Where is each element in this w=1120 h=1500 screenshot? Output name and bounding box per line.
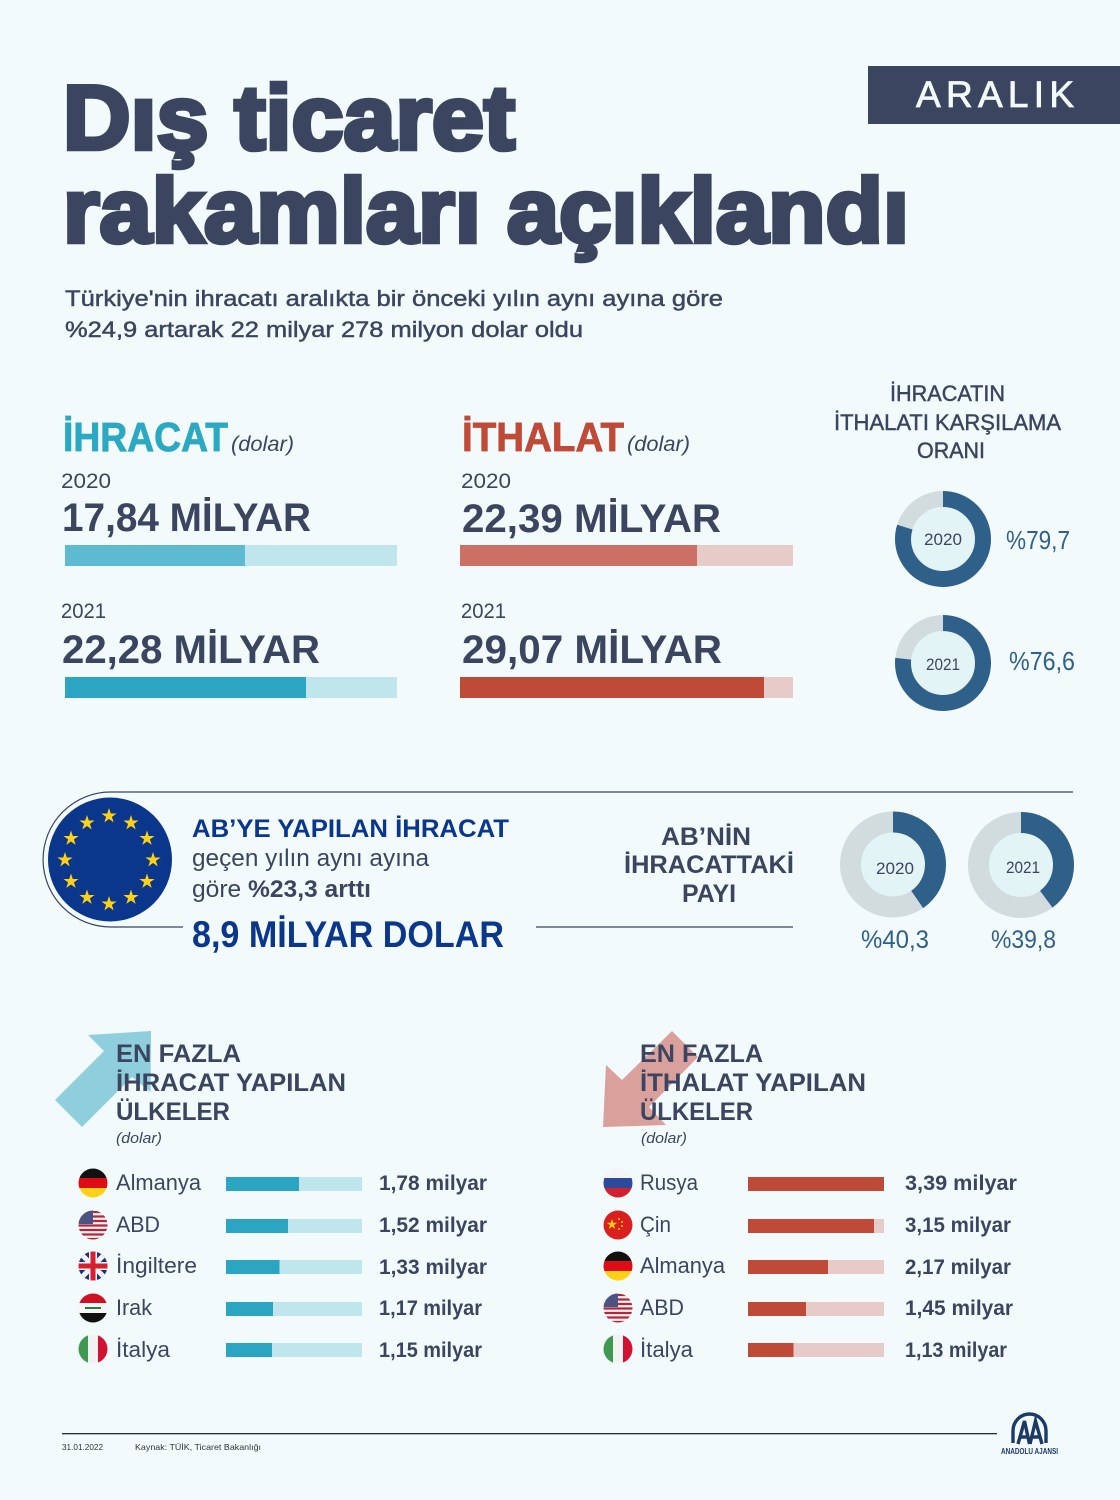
export 2020 value: 17,84 MİLYAR xyxy=(62,496,311,540)
text block: EU exports: AB’YE YAPILAN İHRACAT xyxy=(192,815,509,843)
heading: top import countries: (dolar) xyxy=(641,1130,687,1147)
row: Çin xyxy=(604,1210,1011,1240)
subtitle text xyxy=(65,286,723,342)
heading: top export countries xyxy=(116,1040,346,1147)
heading: coverage ratio: İTHALATI KARŞILAMA xyxy=(834,410,1061,435)
icon: up arrow xyxy=(55,1031,151,1127)
row: İngiltere: 1,33 milyar xyxy=(379,1256,487,1279)
row: İtalya: 1,13 milyar xyxy=(905,1339,1007,1362)
export 2021 value: 2021 xyxy=(61,600,106,623)
heading: coverage ratio: İHRACATIN xyxy=(890,381,1005,406)
heading: İhracat: İHRACAT xyxy=(63,414,228,460)
subtitle text: %24,9 artarak 22 milyar 278 milyon dolar oldu xyxy=(65,317,583,342)
donut: EU share 2021 xyxy=(978,822,1064,954)
donut: EU share 2021: 2021 xyxy=(1006,858,1040,877)
export 2021 bar xyxy=(65,677,397,698)
donut: coverage 2020: 2020 xyxy=(924,530,962,549)
row: Irak: 1,17 milyar xyxy=(379,1297,482,1320)
row: İtalya xyxy=(78,1334,482,1364)
row: ABD: ABD xyxy=(116,1212,160,1237)
row: ABD: 1,52 milyar xyxy=(379,1214,487,1237)
title: rakamları açıklandı xyxy=(63,161,909,262)
export 2021 value: 22,28 MİLYAR xyxy=(62,628,320,672)
row: Rusya: Rusya xyxy=(640,1170,699,1195)
row: Rusya xyxy=(604,1174,1017,1198)
donut: EU share 2021: %39,8 xyxy=(991,926,1056,954)
heading: top export countries: İHRACAT YAPILAN xyxy=(116,1069,346,1097)
heading: top import countries: EN FAZLA xyxy=(640,1040,763,1068)
row: ABD: ABD xyxy=(640,1295,684,1320)
donut: coverage 2021 xyxy=(903,623,1075,703)
export 2020 bar xyxy=(65,545,397,566)
row: Almanya xyxy=(603,1251,1011,1281)
row: Almanya xyxy=(78,1168,487,1198)
row: ABD xyxy=(603,1293,1013,1323)
footer source text: Kaynak: TÜİK, Ticaret Bakanlığı xyxy=(135,1442,261,1452)
row: Irak xyxy=(78,1293,482,1323)
import 2021 value: 29,07 MİLYAR xyxy=(462,628,722,672)
month badge: ARALIK xyxy=(868,66,1120,124)
panel: top import countries xyxy=(603,1031,1017,1364)
icon: down arrow xyxy=(603,1031,698,1127)
export 2020 value: 2020 xyxy=(61,470,111,493)
text block: EU exports: 8,9 MİLYAR DOLAR xyxy=(192,914,504,955)
donut: EU share 2020: 2020 xyxy=(876,859,914,878)
row: Almanya: 2,17 milyar xyxy=(905,1256,1011,1279)
heading: İthalat: (dolar) xyxy=(627,433,690,456)
footer source text: 31.01.2022 xyxy=(62,1442,103,1452)
footer rule xyxy=(62,1433,997,1434)
row: Almanya: Almanya xyxy=(116,1170,202,1195)
heading: EU share: İHRACATTAKİ xyxy=(624,851,794,879)
import 2020 value: 2020 xyxy=(461,470,511,493)
row: Rusya: 3,39 milyar xyxy=(905,1172,1017,1195)
import 2020 value: 22,39 MİLYAR xyxy=(462,497,721,541)
row: İngiltere xyxy=(78,1251,487,1281)
heading: EU share xyxy=(624,823,794,908)
heading: top import countries: İTHALAT YAPILAN xyxy=(640,1069,866,1097)
row: Irak: Irak xyxy=(116,1295,153,1320)
heading: EU share: PAYI xyxy=(682,880,736,908)
text block: EU exports xyxy=(192,815,509,955)
import 2020 value xyxy=(461,470,721,541)
heading: top import countries xyxy=(640,1040,866,1147)
donut: EU share 2020 xyxy=(850,822,936,954)
text block: EU exports: göre %23,3 arttı xyxy=(192,876,371,903)
donut: coverage 2020: %79,7 xyxy=(1006,525,1070,555)
row: Çin: 3,15 milyar xyxy=(905,1214,1011,1237)
heading: top export countries: (dolar) xyxy=(116,1130,162,1147)
donut: coverage 2021: %76,6 xyxy=(1009,646,1075,676)
donut: coverage 2020 xyxy=(903,499,1070,579)
import 2021 bar xyxy=(460,677,793,698)
heading: coverage ratio xyxy=(834,381,1061,463)
heading: top export countries: ÜLKELER xyxy=(116,1097,230,1126)
icon: EU flag xyxy=(48,798,172,922)
row: İngiltere: İngiltere xyxy=(116,1253,197,1278)
title xyxy=(63,68,909,262)
month badge: ARALIK: ARALIK xyxy=(916,74,1074,115)
heading: EU share: AB’NİN xyxy=(661,823,751,851)
row: İtalya: İtalya xyxy=(116,1337,171,1362)
panel: export totals xyxy=(61,414,397,698)
heading: İhracat: (dolar) xyxy=(231,433,294,456)
row: Çin: Çin xyxy=(640,1212,671,1237)
footer source text xyxy=(62,1442,261,1452)
row: İtalya xyxy=(603,1334,1007,1364)
donut: EU share 2020: %40,3 xyxy=(861,926,929,954)
row: Almanya: Almanya xyxy=(640,1253,726,1278)
row: İtalya: İtalya xyxy=(640,1337,694,1362)
row: ABD: 1,45 milyar xyxy=(905,1297,1013,1320)
import 2020 bar xyxy=(460,545,793,566)
icon: Anadolu Ajansı logo xyxy=(1001,1414,1058,1456)
export 2020 value xyxy=(61,470,311,540)
row: Almanya: 1,78 milyar xyxy=(379,1172,487,1195)
donut: coverage 2021: 2021 xyxy=(926,655,960,674)
text block: EU exports: geçen yılın aynı ayına xyxy=(192,845,430,872)
import 2021 value: 2021 xyxy=(461,600,506,623)
import 2021 value xyxy=(461,600,722,672)
subtitle text: Türkiye'nin ihracatı aralıkta bir önceki yılın aynı ayına göre xyxy=(65,286,723,311)
title: Dış ticaret xyxy=(63,68,515,169)
row: İtalya: 1,15 milyar xyxy=(379,1339,482,1362)
panel outline: EU section xyxy=(43,792,1073,927)
panel: import totals xyxy=(460,414,793,698)
icon: Anadolu Ajansı logo: ANADOLU AJANSI xyxy=(1001,1446,1058,1456)
panel: top export countries xyxy=(55,1031,487,1364)
export 2021 value xyxy=(61,600,320,672)
row: ABD xyxy=(78,1210,487,1240)
heading: coverage ratio: ORANI xyxy=(917,438,985,463)
heading: top import countries: ÜLKELER xyxy=(640,1097,753,1126)
heading: top export countries: EN FAZLA xyxy=(116,1040,241,1068)
heading: İthalat: İTHALAT xyxy=(462,414,624,460)
